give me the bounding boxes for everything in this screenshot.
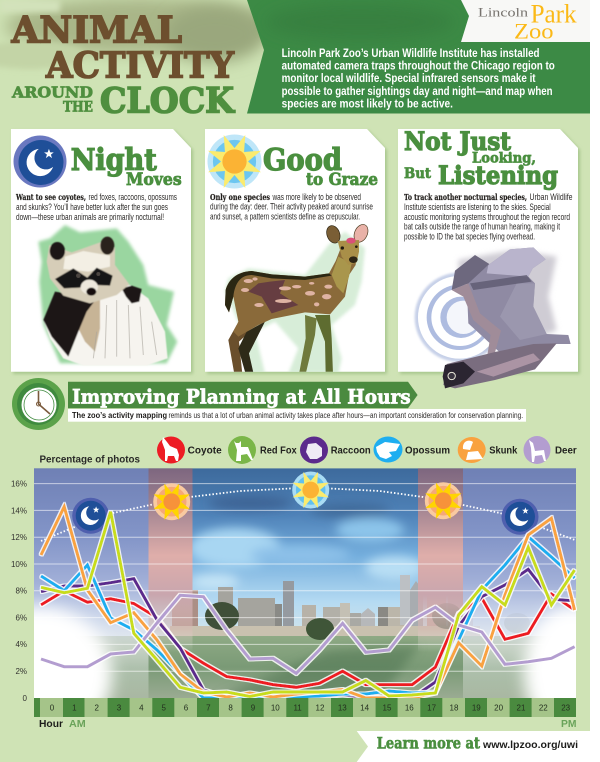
footer: learn more: Learn more at (377, 733, 481, 752)
heading (404, 127, 558, 190)
axis caption: hour am: Hour (39, 718, 63, 730)
y-axis title: Percentage of photos (40, 454, 140, 466)
heading (263, 143, 378, 189)
hour axis (34, 698, 576, 717)
intro text: possible to gather sightings day and night—and map when (282, 86, 552, 98)
icon: noon sun (292, 472, 329, 508)
body text: during the day: deer. Their activity peaked around sunrise (210, 202, 373, 212)
illustration: bat (415, 247, 571, 388)
body text (210, 192, 373, 221)
legend: raccoon: Raccoon (331, 445, 371, 456)
icon: clock (12, 378, 65, 430)
heading: Listening (438, 161, 558, 190)
white fade left (34, 598, 122, 698)
hour axis: 8 (228, 704, 233, 712)
title (11, 10, 235, 122)
y-axis labels: 12% (11, 533, 27, 542)
hour axis: 12 (316, 704, 325, 712)
y-axis labels: 4% (15, 640, 27, 649)
subheading strip: The zoo’s activity mapping (72, 410, 167, 420)
hour axis: 2 (94, 704, 99, 712)
heading: improving planning: Improving Planning at All Hours (72, 384, 411, 408)
heading: But (404, 166, 431, 182)
icon: moon (14, 136, 66, 188)
clouds (189, 496, 425, 590)
axis caption: hour am: AM (69, 718, 86, 730)
heading (71, 143, 182, 189)
hour axis: 4 (139, 704, 144, 712)
hour axis: 9 (251, 704, 256, 712)
y-axis labels: 8% (15, 587, 27, 596)
white fade right (514, 598, 576, 698)
panel: night moves (11, 129, 193, 374)
body text: was more likely to be observed (272, 192, 361, 202)
hour axis: 1 (72, 704, 77, 712)
body text: and sunset, a pattern scientists define as crepuscular. (210, 211, 360, 221)
hour axis: 13 (338, 704, 347, 712)
legend: raccoon (300, 436, 371, 464)
hour axis: 22 (539, 704, 548, 712)
heading: to Graze (306, 170, 378, 189)
hour axis: 23 (561, 704, 571, 712)
y-axis labels: 14% (11, 506, 27, 515)
illustration: deer (225, 222, 371, 374)
subheading strip (68, 409, 526, 422)
hour axis: 0 (50, 704, 55, 712)
heading: Good (263, 143, 342, 178)
heading: Looking, (472, 150, 536, 166)
panel: good to graze (205, 129, 387, 374)
icon: moon right (502, 499, 538, 535)
title: CLOCK (100, 81, 235, 122)
body text: Urban Wildlife (530, 192, 573, 202)
y-axis labels: 0 (23, 694, 28, 703)
skyline (170, 575, 480, 636)
series: lime (41, 512, 575, 696)
body text: To track another nocturnal species, (404, 192, 527, 202)
heading: Not Just (404, 127, 511, 156)
heading: Moves (126, 170, 182, 189)
logo: Lincoln Park Zoo (461, 0, 590, 44)
intro banner (247, 0, 590, 114)
legend: coyote (157, 436, 222, 464)
grid lines (34, 484, 576, 671)
intro text: monitor local wildlife. Special infrared sensors make it (282, 73, 536, 85)
legend: coyote: Coyote (188, 445, 222, 456)
chart background: sky and skyline (34, 468, 576, 698)
title: ANIMAL (11, 10, 182, 52)
y-axis labels (11, 480, 28, 703)
y-axis labels: 2% (15, 667, 27, 676)
hour axis: 7 (206, 704, 211, 712)
series: blue (41, 537, 575, 698)
logo: Lincoln Park Zoo: Lincoln (478, 5, 529, 20)
legend: deer: Deer (555, 445, 577, 456)
title: AROUND (11, 85, 93, 102)
series: red (41, 591, 575, 687)
hour axis: 21 (517, 704, 526, 712)
hour axis: 20 (494, 704, 504, 712)
body text: and skunks? You’ll have better luck after the sun goes (16, 202, 168, 212)
night band left (34, 468, 148, 698)
legend: opossum: Opossum (405, 445, 450, 456)
hour axis: 18 (450, 704, 459, 712)
sun path arc (41, 488, 575, 541)
header texture (0, 0, 275, 69)
legend (157, 436, 577, 464)
body text: possible to ID the bat species flying overhead. (404, 231, 535, 241)
grass (92, 636, 538, 698)
line chart (41, 507, 575, 698)
legend: skunk: Skunk (489, 445, 518, 456)
legend: opossum (374, 436, 450, 462)
icon: sun (208, 134, 262, 188)
trees (205, 602, 530, 640)
y-axis labels: 10% (11, 560, 27, 569)
body text: down—these urban animals are primarily nocturnal! (16, 212, 164, 222)
y-axis labels: 16% (11, 480, 27, 488)
icon: sunrise (153, 483, 190, 520)
footer: learn more (357, 731, 600, 762)
hour axis: 14 (360, 704, 370, 712)
hour axis: 6 (184, 704, 189, 712)
heading: Night (71, 143, 157, 178)
axis caption: hour am (39, 718, 86, 730)
hour axis: 15 (383, 704, 392, 712)
hour axis: 3 (117, 704, 122, 712)
hour axis: 5 (161, 704, 166, 712)
series: purple (41, 569, 575, 698)
body text (15, 192, 177, 222)
body text: Want to see coyotes, (15, 192, 86, 202)
icon: moon left (72, 498, 109, 534)
legend: deer (524, 436, 577, 464)
hour axis: 10 (271, 704, 280, 712)
legend: skunk (458, 437, 518, 463)
night band right (463, 468, 576, 698)
panel: not just looking (398, 127, 580, 388)
logo: Lincoln Park Zoo: Park (531, 0, 577, 29)
series: lilac (41, 595, 575, 673)
icon: sunset (425, 482, 462, 519)
legend: red fox (228, 436, 297, 464)
body text: Institute scientists are listening to the skies. Special (404, 202, 551, 212)
hour axis: 17 (427, 704, 437, 712)
title: THE (63, 100, 93, 116)
title: ACTIVITY (45, 45, 235, 86)
logo: Lincoln Park Zoo: Zoo (514, 18, 554, 44)
intro text: species are most likely to be active. (282, 98, 453, 110)
dusk band right (418, 468, 463, 649)
body text (404, 192, 573, 241)
legend: red fox: Red Fox (260, 445, 297, 456)
hour axis: 19 (472, 704, 481, 712)
y-axis labels: 6% (15, 613, 27, 622)
intro text (282, 48, 555, 110)
hour axis: 16 (405, 704, 414, 712)
body text: red foxes, raccoons, opossums (88, 192, 177, 202)
intro text: Lincoln Park Zoo’s Urban Wildlife Institute has installed (282, 48, 540, 60)
footer: learn more: www.lpzoo.org/uwi (482, 739, 578, 751)
axis caption: pm: PM (561, 718, 577, 730)
illustration: raccoon (38, 225, 177, 366)
series: orange (41, 507, 575, 698)
hour axis: 11 (293, 704, 302, 712)
dusk band left (148, 468, 192, 649)
body text: Only one species (210, 192, 270, 202)
intro text: automated camera traps throughout the Chicago region to (282, 61, 555, 73)
